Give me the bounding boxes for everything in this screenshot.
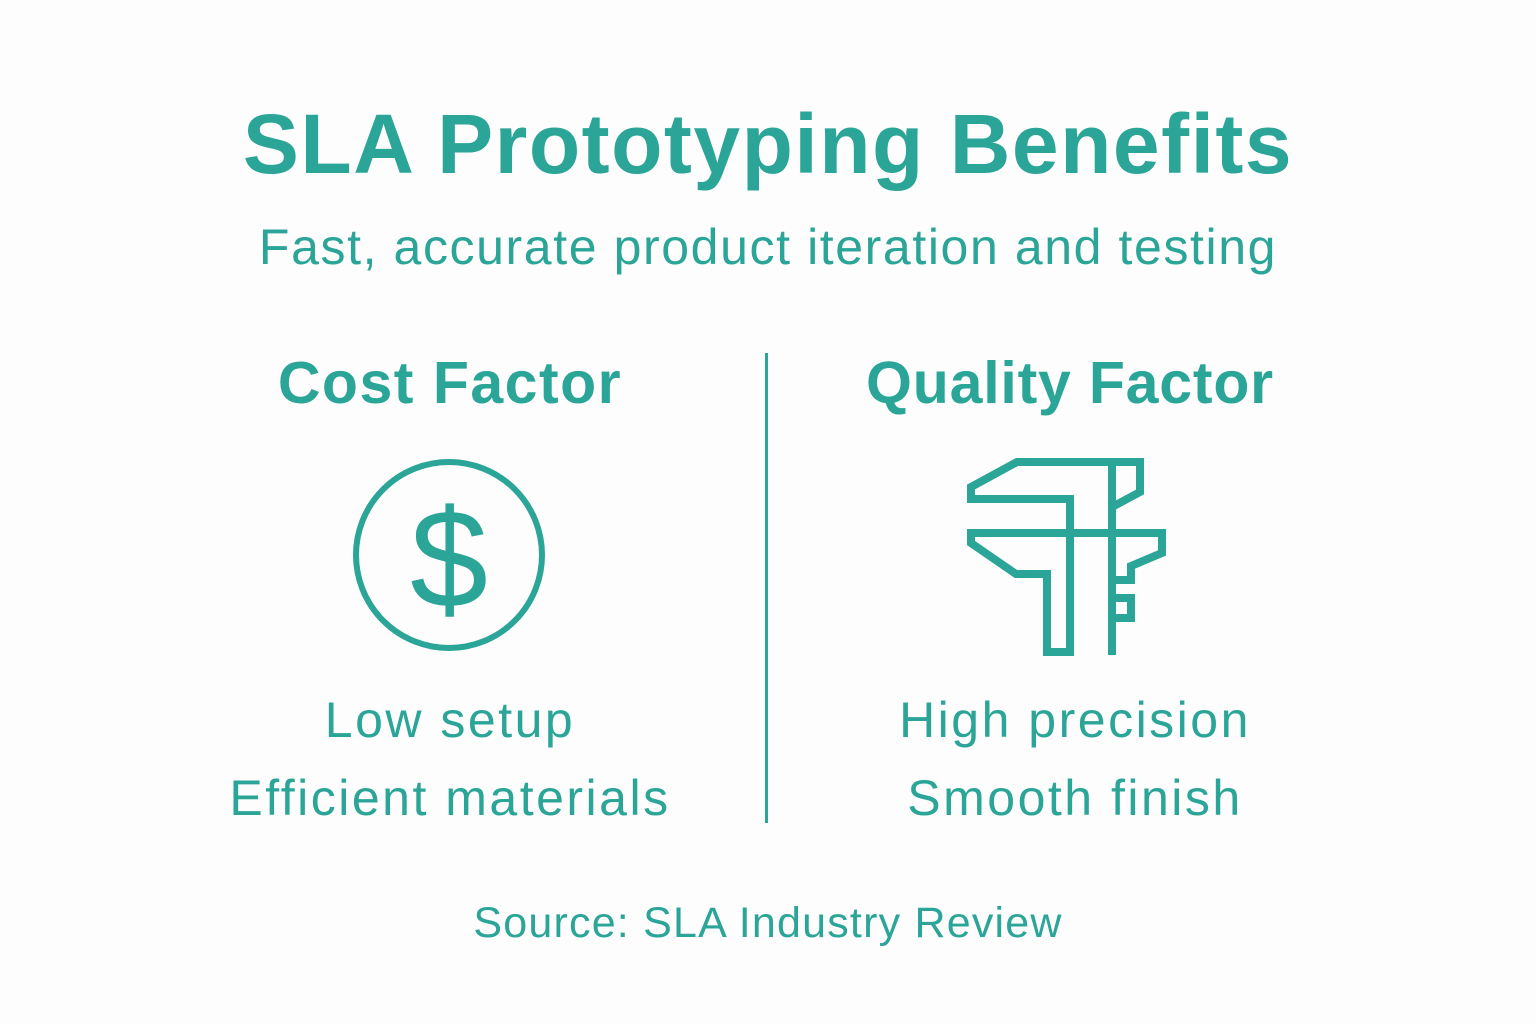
heading: quality factor: Quality Factor bbox=[866, 350, 1274, 416]
text: quality benefits: High precision bbox=[899, 692, 1251, 748]
title: SLA Prototyping Benefits bbox=[243, 97, 1293, 191]
divider bbox=[765, 353, 768, 823]
text: cost benefits: Low setup bbox=[325, 692, 575, 748]
text: quality benefits bbox=[899, 692, 1251, 826]
heading: cost factor: Cost Factor bbox=[278, 350, 622, 416]
source: Source: SLA Industry Review bbox=[473, 899, 1063, 947]
icon: dollar coin: $ bbox=[410, 480, 488, 637]
panel: quality factor bbox=[866, 350, 1274, 826]
icon: dollar coin bbox=[353, 459, 545, 651]
panel: cost factor bbox=[229, 350, 671, 826]
subtitle: Fast, accurate product iteration and testing bbox=[259, 219, 1277, 275]
text: cost benefits bbox=[229, 692, 671, 826]
text: quality benefits: Smooth finish bbox=[907, 770, 1243, 826]
text: cost benefits: Efficient materials bbox=[229, 770, 671, 826]
